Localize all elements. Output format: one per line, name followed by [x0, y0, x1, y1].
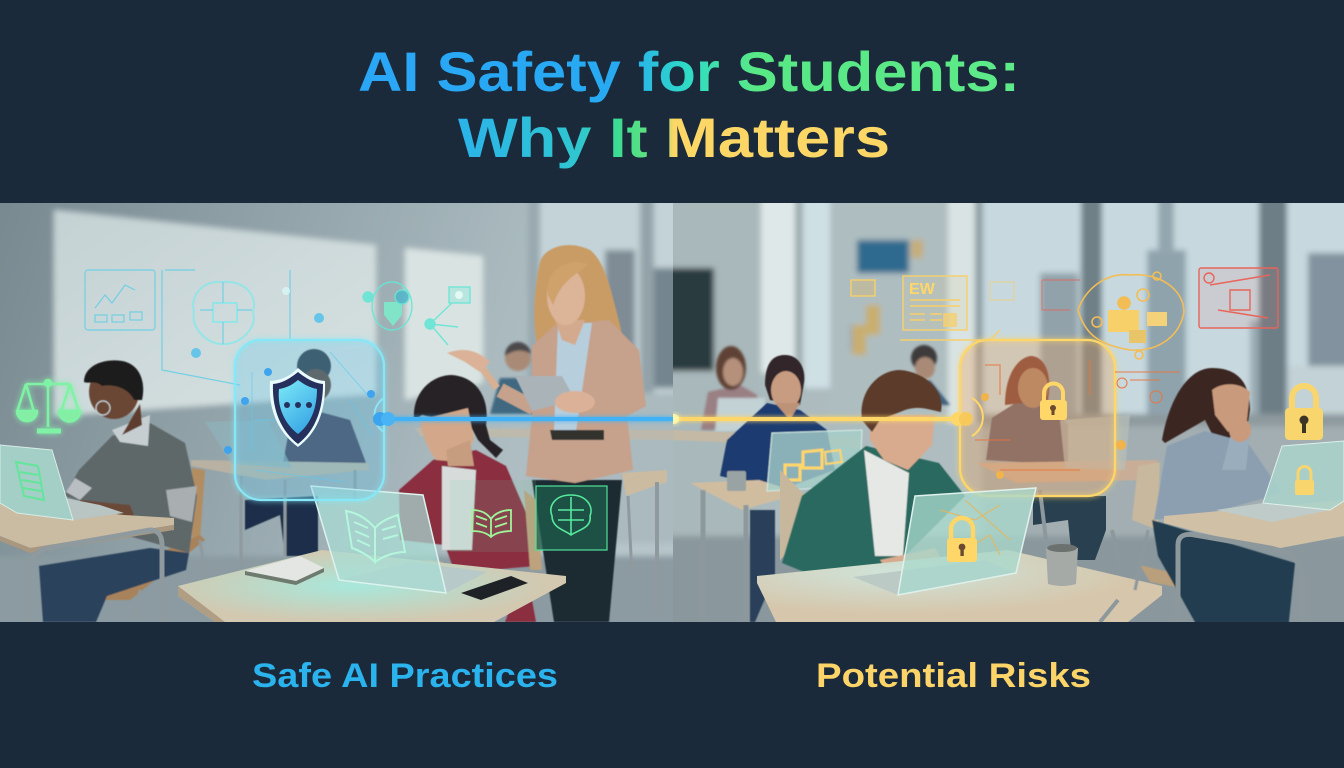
- student with glowing lock: [976, 356, 1158, 483]
- hologram frame with lock: [960, 340, 1180, 496]
- classroom background left: [0, 203, 673, 622]
- blue connector line: [373, 398, 673, 432]
- title: AI Safety for Students:: [358, 40, 1020, 103]
- hologram: news panel and icons: EW: [909, 281, 936, 298]
- classroom background right: [673, 203, 1344, 622]
- icon: large padlock: [1285, 386, 1323, 440]
- student in red cardigan: [399, 375, 542, 622]
- boy in green cardigan: [782, 370, 965, 578]
- teacher: [447, 245, 646, 622]
- front laptop with padlock: [853, 488, 1036, 595]
- girl with hand on chin and chair: [1132, 368, 1295, 640]
- hologram: data panel and brain network: [85, 270, 324, 385]
- hologram: green brain and book panels: [450, 480, 607, 552]
- icon: open book: [346, 511, 405, 562]
- label: potential risks: Potential Risks: [816, 657, 1091, 695]
- title: Why It Matters: [458, 106, 890, 169]
- front desk right: [757, 544, 1162, 622]
- hologram: red circuit panel: [1042, 268, 1278, 328]
- icon: scales of justice: [17, 380, 80, 431]
- icon: padlock on girl's laptop: [1295, 467, 1314, 495]
- background student with pink top: [701, 345, 950, 432]
- chair and jeans behind the lock panel: [780, 470, 1116, 560]
- front desk with items: [178, 550, 566, 622]
- girl's desk and laptop: [1164, 440, 1344, 598]
- icon: padlock in frame: [1040, 384, 1067, 420]
- icon: shield: [270, 368, 325, 447]
- panel: potential risks classroom: [673, 203, 1344, 622]
- icon: padlock on laptop: [947, 518, 977, 562]
- hologram: news panel and icons: [851, 276, 1014, 340]
- hologram: shield network top right: [363, 282, 470, 345]
- hologram: cloud with envelope: [1078, 272, 1184, 359]
- hologram frame with shield: [224, 340, 384, 500]
- student in blue sweater: [673, 355, 862, 622]
- label: safe AI practices: Safe AI Practices: [252, 657, 558, 695]
- background desk right: [415, 428, 673, 559]
- title: [358, 40, 1020, 169]
- student in background with shield: [191, 349, 369, 566]
- background student behind teacher: [490, 342, 536, 414]
- yellow connector line: [669, 398, 983, 436]
- boy's desk and laptop: [0, 444, 174, 580]
- laptop with book icon: [311, 486, 487, 593]
- boy with sweater and chair: [39, 360, 212, 622]
- panel: safe AI practices classroom: [0, 203, 673, 622]
